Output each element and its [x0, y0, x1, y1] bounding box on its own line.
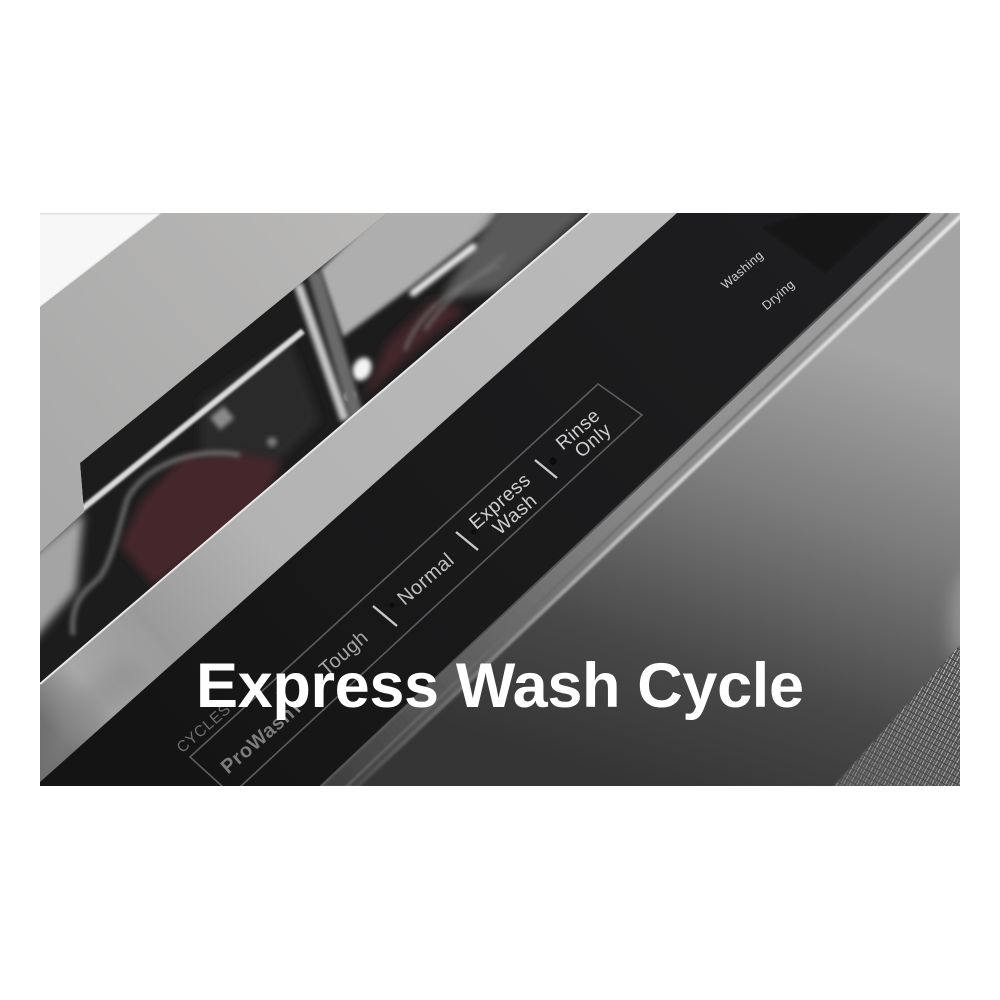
horizontal rack rod — [75, 328, 306, 520]
gray reflection left of the rack — [30, 512, 84, 645]
red dish lower — [120, 453, 282, 585]
gray interior reflection — [320, 205, 505, 337]
lower stainless band — [40, 213, 677, 782]
label: Express Wash: Wash — [489, 489, 542, 540]
upper door reflection band — [40, 213, 386, 309]
display window — [763, 213, 890, 272]
label: Tough: Tough — [315, 626, 373, 680]
white wall corner — [40, 213, 162, 307]
separator bars — [277, 460, 557, 712]
textured corner — [834, 573, 960, 786]
vertical rack post — [314, 272, 358, 420]
label: Normal: Normal — [393, 549, 459, 610]
red dish upper — [362, 298, 465, 400]
label: Washing: Washing — [719, 248, 766, 292]
label: ProWash: ProWash — [217, 703, 299, 778]
door face — [357, 217, 960, 787]
band shadow mottling — [60, 664, 140, 748]
rack wire — [73, 453, 240, 635]
panel labels — [174, 248, 798, 778]
label: Rinse Only: Only — [571, 419, 616, 462]
black control panel — [40, 213, 930, 787]
photo: dishwasher control panel — [30, 205, 999, 787]
button dots — [390, 458, 556, 608]
label: Rinse Only: Rinse — [552, 405, 605, 455]
title: Express Wash Cycle — [196, 651, 804, 721]
upper rack wires — [405, 255, 505, 350]
cycle selector outline — [190, 384, 642, 787]
dishwasher interior window — [30, 205, 595, 684]
dim interior mottling — [201, 346, 317, 460]
label: Drying: Drying — [759, 277, 798, 313]
door trim — [320, 213, 962, 787]
label: Express Wash: Express — [465, 469, 535, 534]
rack highlights — [413, 247, 473, 293]
window bottom highlight — [40, 213, 590, 684]
label: CYCLES: CYCLES — [174, 701, 234, 757]
